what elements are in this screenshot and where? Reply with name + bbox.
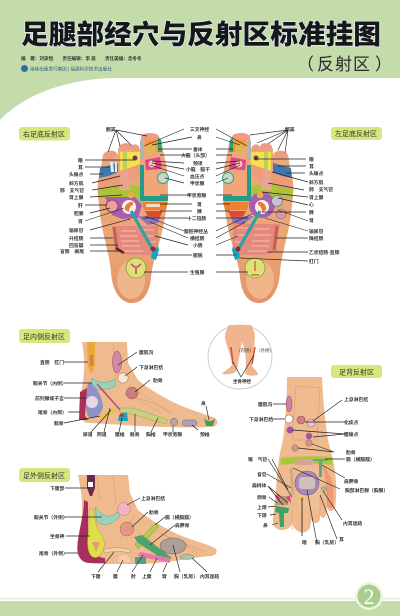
dorsal foot labels: 下颌: [257, 512, 267, 519]
medial foot labels: 前列腺或子宫: [35, 395, 64, 402]
lateral foot leader lines: [64, 488, 207, 572]
left sole labels: 耳: [309, 164, 314, 170]
center labels between feet: 腹腔神经丛: [184, 228, 208, 235]
right sole labels: 升结肠: [69, 235, 84, 242]
right sole leader lines: [85, 129, 192, 272]
dorsal foot illustration: [273, 377, 336, 536]
center labels between feet: 颈项: [193, 160, 203, 167]
medial foot labels: 直肠 肛门: [40, 359, 64, 366]
dorsal foot labels: 上身淋巴结: [344, 396, 368, 403]
left sole labels: 肾: [309, 217, 314, 224]
right sole labels: 肺 支气管: [60, 187, 84, 194]
medial foot illustration: [79, 342, 217, 427]
lateral foot labels: 上身淋巴结: [141, 495, 165, 502]
right foot sole illustration: [98, 133, 168, 303]
left sole labels: 乙状结肠·直肠: [309, 249, 340, 256]
medial foot labels: 骶骨: [130, 431, 140, 438]
right sole labels: 盲肠 阑尾: [60, 248, 84, 255]
heading: right sole: [19, 127, 70, 140]
left sole labels: 斜方肌: [309, 179, 324, 186]
center labels between feet: 甲状旁腺: [187, 192, 206, 199]
left sole labels: 心: [309, 201, 314, 208]
page number badge: 2: [364, 584, 374, 609]
left sole labels: 头痛点: [309, 170, 324, 177]
page number badge: [355, 582, 383, 610]
medial foot labels: 髋关节（内侧）: [33, 380, 67, 387]
title: 足腿部经穴与反射区标准挂图: [21, 19, 381, 50]
medial foot labels: 尾骨（内侧）: [38, 409, 67, 416]
dorsal foot labels: [248, 396, 388, 546]
medial foot labels: 胸椎: [146, 431, 156, 438]
dorsal foot labels: 膈（横膈膜）: [346, 456, 375, 463]
center labels between feet: 横结肠: [190, 235, 205, 242]
footer band: [0, 598, 400, 616]
lateral foot labels: 肩胛骨: [175, 522, 190, 529]
dorsal foot labels: 化痰点: [344, 419, 359, 426]
center labels between feet: 十二指肠: [187, 215, 206, 222]
dorsal foot labels: 内耳迷路: [343, 520, 362, 527]
dorsal foot labels: 眼: [302, 540, 307, 546]
center labels between feet: 胃: [197, 202, 202, 208]
medial foot labels: 肋骨: [153, 377, 163, 384]
heading: dorsal foot: 足背反射区: [339, 368, 374, 376]
left sole labels: 降结肠: [309, 235, 324, 242]
panel: dorsal foot: [248, 365, 388, 546]
lateral foot labels: 髋关节（外侧）: [34, 514, 68, 521]
right sole labels: 输尿管: [69, 227, 84, 234]
dorsal foot labels: 上颌: [257, 504, 267, 511]
medial foot labels: 腰椎: [115, 431, 125, 438]
lateral foot labels: 尾骨（外侧）: [39, 550, 68, 557]
dorsal foot leader lines: [267, 400, 345, 543]
left sole labels: 肾上腺: [309, 194, 324, 201]
dorsal foot labels: 鼻: [263, 522, 268, 529]
lateral foot labels: 腰: [113, 574, 118, 580]
right sole labels: 头痛点: [69, 171, 84, 178]
dorsal foot labels: 食管: [257, 471, 267, 478]
right sole labels: 回盲瓣: [69, 242, 84, 249]
dorsal foot labels: 腰痛点: [344, 431, 359, 438]
left sole leader lines: [216, 129, 308, 272]
medial foot labels: 髋骨: [54, 420, 64, 427]
publisher logo: 海峡出版发行集团 | 福建科学技术出版社: [30, 66, 112, 72]
left sole labels: 肺 支气管: [309, 186, 333, 193]
lateral foot labels: 膈（横膈膜）: [165, 514, 194, 521]
medial foot labels: [33, 349, 210, 438]
header green background: [0, 0, 400, 120]
editor credits: 编 著：刘家恒 责任编辑：李 高 责任美编：念冬冬: [21, 55, 142, 62]
right sole labels: 斜方肌: [69, 180, 84, 187]
left foot sole illustration: [222, 133, 293, 303]
right sole labels: 胆囊: [74, 210, 84, 217]
subtitle: （反射区）: [297, 55, 392, 74]
dorsal foot labels: 肋骨: [346, 449, 356, 456]
panel: left sole: [216, 126, 382, 303]
inset: tibial nerve legs circle: （外侧）: [256, 347, 274, 354]
heading: lateral foot: [19, 468, 70, 482]
lateral foot labels: 肘: [131, 573, 136, 580]
center labels between feet: 小肠: [193, 242, 203, 249]
left sole labels: [285, 126, 340, 265]
left sole labels: 肛门: [309, 258, 319, 265]
inset: tibial nerve legs circle: （内侧）: [236, 347, 254, 354]
left sole labels: 眼: [309, 157, 314, 163]
panel: medial foot: [19, 329, 217, 438]
right sole labels: 额窦: [106, 126, 116, 133]
dorsal foot labels: 肩胛骨: [344, 478, 359, 485]
medial foot labels: 阴道: [97, 431, 107, 438]
heading: medial foot: 足内侧反射区: [23, 332, 65, 341]
lateral foot labels: 上腹: [142, 573, 152, 580]
center labels between feet: 胰: [197, 208, 202, 215]
publisher logo: [21, 65, 112, 72]
dorsal foot labels: 下身淋巴结: [249, 416, 273, 423]
dorsal foot labels: 胸部淋巴腺（胸腺）: [345, 487, 388, 494]
center labels between feet: 生殖腺: [190, 269, 205, 276]
right sole labels: 耳: [78, 165, 83, 171]
lateral foot labels: 臂: [162, 573, 167, 580]
center labels between feet: 膀胱: [193, 252, 203, 259]
center labels between feet: 垂体: [193, 146, 203, 153]
medial foot labels: 颈椎: [200, 431, 210, 438]
center labels between feet: 甲状腺: [190, 180, 205, 187]
dorsal foot labels: 胸（乳房）: [315, 539, 339, 546]
dorsal foot labels: 扁桃体: [252, 482, 267, 489]
medial foot leader lines: [64, 352, 209, 432]
lateral foot illustration: [77, 475, 217, 564]
heading: dorsal foot: [331, 365, 382, 378]
heading: left sole: 左足底反射区: [335, 129, 377, 138]
center labels between feet: [181, 126, 210, 276]
center labels between feet: 血压点: [190, 173, 205, 180]
medial foot labels: 腰肌沟: [139, 349, 154, 356]
center labels between feet: 大脑（头部）: [181, 152, 210, 159]
medial foot labels: 鼻: [201, 400, 206, 407]
right sole labels: [60, 126, 116, 255]
medial foot labels: 甲状旁腺: [163, 431, 182, 438]
dorsal foot labels: 腰肌沟: [258, 401, 273, 408]
right sole labels: 肾: [78, 218, 83, 225]
right sole labels: 肾上腺: [69, 194, 84, 201]
left sole labels: 输尿管: [309, 228, 324, 235]
dorsal foot labels: 喉 气管: [248, 456, 267, 463]
lateral foot labels: 胸（乳房）: [174, 573, 198, 580]
dorsal foot labels: 耳: [339, 537, 344, 543]
lateral foot labels: 坐骨神: [50, 533, 65, 540]
medial foot labels: 下身淋巴结: [139, 364, 163, 371]
center labels between feet: 三叉神经: [190, 126, 209, 133]
lateral foot labels: 内耳迷路: [200, 573, 219, 580]
dorsal foot labels: 颌骨: [257, 494, 267, 501]
medial foot labels: 尿道: [83, 431, 93, 438]
center labels between feet: 鼻: [197, 134, 202, 141]
lateral foot labels: 肋骨: [149, 509, 159, 516]
panel: right sole: [19, 126, 192, 303]
inset: tibial nerve legs circle: 坐骨神经: [233, 378, 251, 385]
heading: right sole: 右足底反射区: [23, 130, 65, 138]
panel: lateral foot: [19, 468, 219, 580]
right sole labels: 眼: [78, 158, 83, 164]
left sole labels: 额窦: [285, 126, 295, 133]
heading: left sole: [331, 127, 382, 140]
inset: tibial nerve legs circle: [208, 325, 274, 389]
lateral foot labels: 下腹: [91, 573, 101, 580]
center labels between feet: 小脑 脑干: [186, 166, 210, 173]
heading: medial foot: [19, 329, 70, 343]
left sole labels: 脾: [309, 209, 314, 216]
right sole labels: 肝: [78, 203, 83, 209]
lateral foot labels: 下腹部: [50, 485, 65, 492]
lateral foot labels: [34, 485, 219, 580]
heading: lateral foot: 足外侧反射区: [23, 471, 65, 480]
